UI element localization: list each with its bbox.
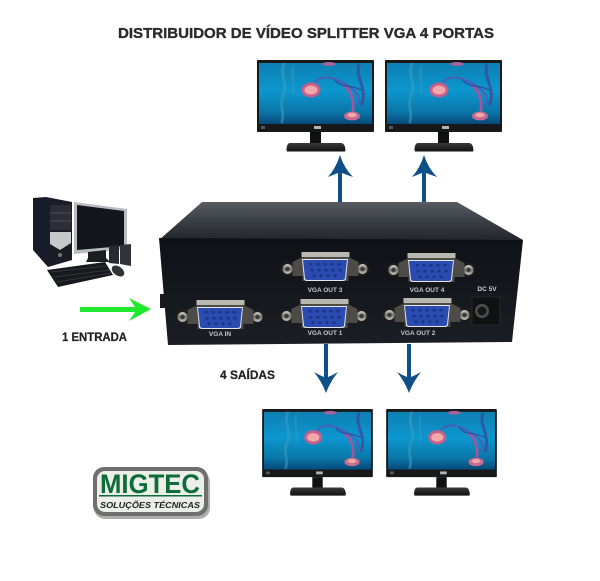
arrow: down to bottom right monitor <box>397 344 421 393</box>
connector: VGA OUT 1: VGA OUT 1 <box>308 330 343 337</box>
monitor: output top right <box>385 60 502 152</box>
label: 1 entrada: 1 ENTRADA <box>62 332 127 344</box>
connector: VGA OUT 4 <box>386 253 476 294</box>
connector: VGA IN: VGA IN <box>209 331 231 338</box>
connector: VGA IN <box>176 300 264 338</box>
monitor: output bottom right <box>386 409 497 496</box>
connector: VGA OUT 3 <box>280 252 370 294</box>
logo: Migtec: SOLUÇÕES TÉCNICAS <box>100 500 200 510</box>
title: DISTRIBUIDOR DE VÍDEO SPLITTER VGA 4 PORTAS <box>118 25 494 42</box>
connector: VGA OUT 2 <box>382 298 472 337</box>
arrow: green input <box>80 298 151 321</box>
logo: Migtec <box>93 467 210 519</box>
monitor: output top left <box>257 60 374 152</box>
device: VGA splitter box <box>159 202 523 345</box>
connector: VGA OUT 2: VGA OUT 2 <box>401 330 436 337</box>
connector: DC 5V: DC 5V <box>477 286 497 293</box>
arrow: up to top right monitor <box>412 155 437 204</box>
arrow: down to bottom left monitor <box>314 344 338 393</box>
label: 4 saídas: 4 SAÍDAS <box>220 369 275 382</box>
computer: desktop with tower, monitor, keyboard and speakers <box>33 197 131 287</box>
connector: VGA OUT 3: VGA OUT 3 <box>308 287 343 294</box>
monitor: output bottom left <box>262 409 373 496</box>
logo: Migtec: MIGTEC <box>100 469 200 499</box>
connector: DC 5V <box>472 286 500 325</box>
arrow: up to top left monitor <box>328 155 353 204</box>
connector: VGA OUT 4: VGA OUT 4 <box>410 287 445 294</box>
connector: VGA OUT 1 <box>280 299 368 337</box>
